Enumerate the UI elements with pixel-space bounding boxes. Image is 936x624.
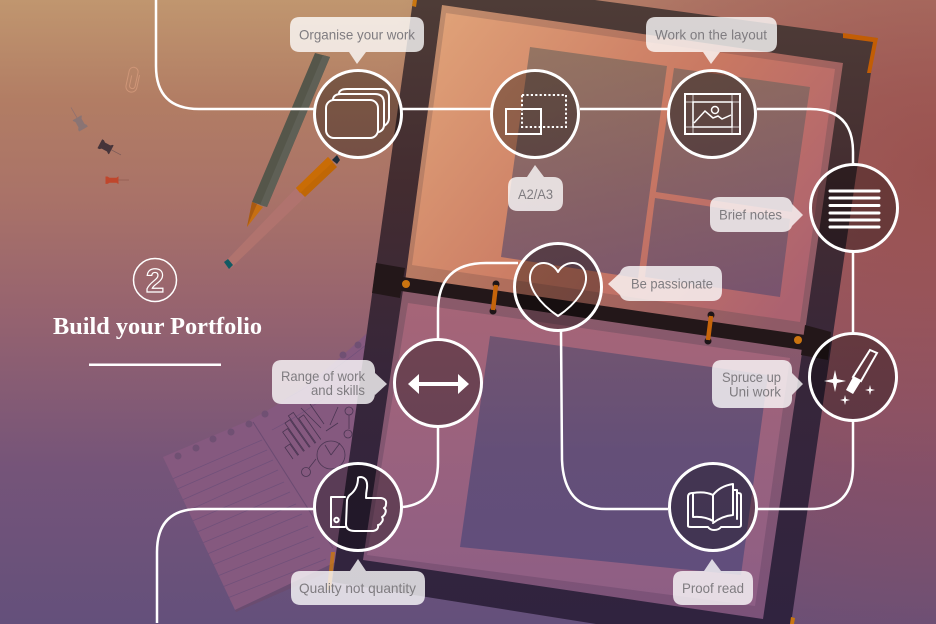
- callout: spruce up uni work: Spruce up: [722, 369, 781, 385]
- step: be passionate: [514, 244, 602, 330]
- step: organise your work: [314, 70, 402, 158]
- binder frame: [332, 0, 876, 624]
- callout: A2/A3: [508, 165, 563, 211]
- callout: be passionate: Be passionate: [631, 276, 713, 292]
- step: range of work and skills: [394, 340, 482, 426]
- portfolio binder: [327, 0, 878, 624]
- icon: paper clip: [125, 66, 141, 93]
- number badge 2: 2: [146, 262, 164, 299]
- title: Build your Portfolio: [53, 314, 262, 340]
- note paper with doodles: [163, 334, 366, 612]
- icon: red push pin: [106, 176, 129, 184]
- step: spruce up uni work: [810, 334, 896, 420]
- icon: dark push pin: [97, 139, 123, 159]
- icon: open book: [688, 484, 741, 530]
- pen: [224, 155, 340, 269]
- callout: range of work: and skills: [311, 382, 365, 398]
- binder spine: [372, 263, 831, 360]
- icon: marker and sparkles: [824, 350, 877, 405]
- callout: work on the layout: Work on the layout: [655, 26, 767, 42]
- icon: paper sizes: [506, 95, 566, 134]
- callout: quality not quantity: Quality not quantity: [299, 580, 416, 596]
- callout: brief notes: [710, 197, 803, 232]
- orange binder dots and rings: [402, 280, 802, 344]
- number badge 2: [134, 258, 176, 302]
- photo placeholder left: [501, 47, 667, 278]
- callout: organise your work: [290, 17, 424, 64]
- callout: A2/A3: A2/A3: [518, 186, 553, 202]
- photo placeholder top right: [656, 68, 810, 212]
- icon: image layout: [685, 94, 740, 134]
- callout: proof read: Proof read: [682, 580, 744, 596]
- callout: be passionate: [608, 266, 722, 301]
- pencil: [247, 53, 330, 227]
- title underline: [89, 364, 221, 366]
- connector lines: [156, 0, 853, 623]
- icon: text lines: [830, 191, 879, 227]
- icon: heart: [530, 263, 586, 316]
- callout: spruce up uni work: [712, 360, 803, 408]
- callout: proof read: [673, 559, 753, 605]
- step: work on the layout: [668, 70, 756, 158]
- step: proof read: [670, 464, 756, 550]
- photo placeholder bottom right: [645, 198, 790, 297]
- orange corner tabs: [327, 0, 878, 624]
- callout: spruce up uni work: Uni work: [729, 384, 782, 400]
- callout: brief notes: Brief notes: [719, 206, 782, 222]
- large photo placeholder: [460, 336, 768, 575]
- upper page: [405, 5, 843, 338]
- callout: range of work: Range of work: [281, 368, 366, 384]
- callout: work on the layout: [646, 17, 777, 64]
- callout: quality not quantity: [291, 559, 425, 605]
- step: brief notes: [810, 164, 898, 252]
- icon: grey push pin: [67, 105, 88, 132]
- step: quality not quantity: [314, 464, 402, 550]
- icon: thumbs up: [331, 477, 386, 531]
- icon: double arrow: [408, 374, 469, 394]
- step: A2/A3: [492, 70, 578, 158]
- callout: organise your work: Organise your work: [299, 26, 416, 42]
- callout: range of work: [272, 360, 387, 404]
- lower page: [363, 290, 803, 619]
- icon: stacked cards: [326, 89, 389, 138]
